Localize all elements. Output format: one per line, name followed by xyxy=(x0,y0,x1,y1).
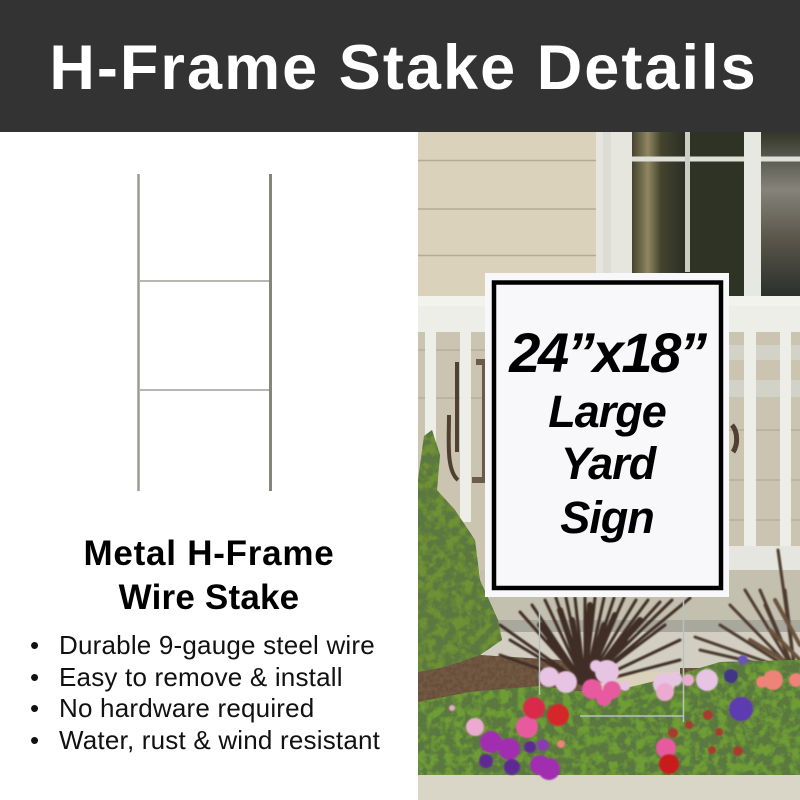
petunias xyxy=(449,655,800,780)
house siding xyxy=(418,132,800,800)
feature list: • xyxy=(30,630,39,660)
porch railing xyxy=(418,296,800,570)
stake heading: Wire Stake xyxy=(119,578,299,617)
feature list: Easy to remove & install xyxy=(59,662,343,692)
sign label text: Sign xyxy=(560,492,654,543)
feature list: No hardware required xyxy=(59,693,314,723)
stake heading xyxy=(84,534,334,617)
header banner xyxy=(0,0,800,132)
feature list: • xyxy=(30,662,39,692)
feature list xyxy=(30,630,380,754)
title: H-Frame Stake Details xyxy=(49,33,758,103)
ornamental grasses xyxy=(500,550,800,685)
sign label text xyxy=(548,386,666,543)
sign size text: 24”x18” xyxy=(508,321,707,384)
stake heading: Metal H-Frame xyxy=(84,534,334,573)
mulch xyxy=(418,655,800,705)
window xyxy=(596,132,800,302)
shrub xyxy=(418,430,502,672)
photo scene: yard sign in front of porch xyxy=(418,132,800,800)
ground and porch floor xyxy=(418,570,800,800)
feature list: Durable 9-gauge steel wire xyxy=(59,630,375,660)
sign label text: Large xyxy=(548,386,666,437)
feature list: • xyxy=(30,693,39,723)
wire stake legs xyxy=(540,597,684,722)
feature list: Water, rust & wind resistant xyxy=(59,724,380,754)
sign label text: Yard xyxy=(561,438,658,489)
porch chair xyxy=(449,362,737,480)
yard sign xyxy=(485,273,729,597)
illustration: H-frame wire stake xyxy=(137,174,272,491)
feature list: • xyxy=(30,724,39,754)
flower bed xyxy=(418,655,800,780)
